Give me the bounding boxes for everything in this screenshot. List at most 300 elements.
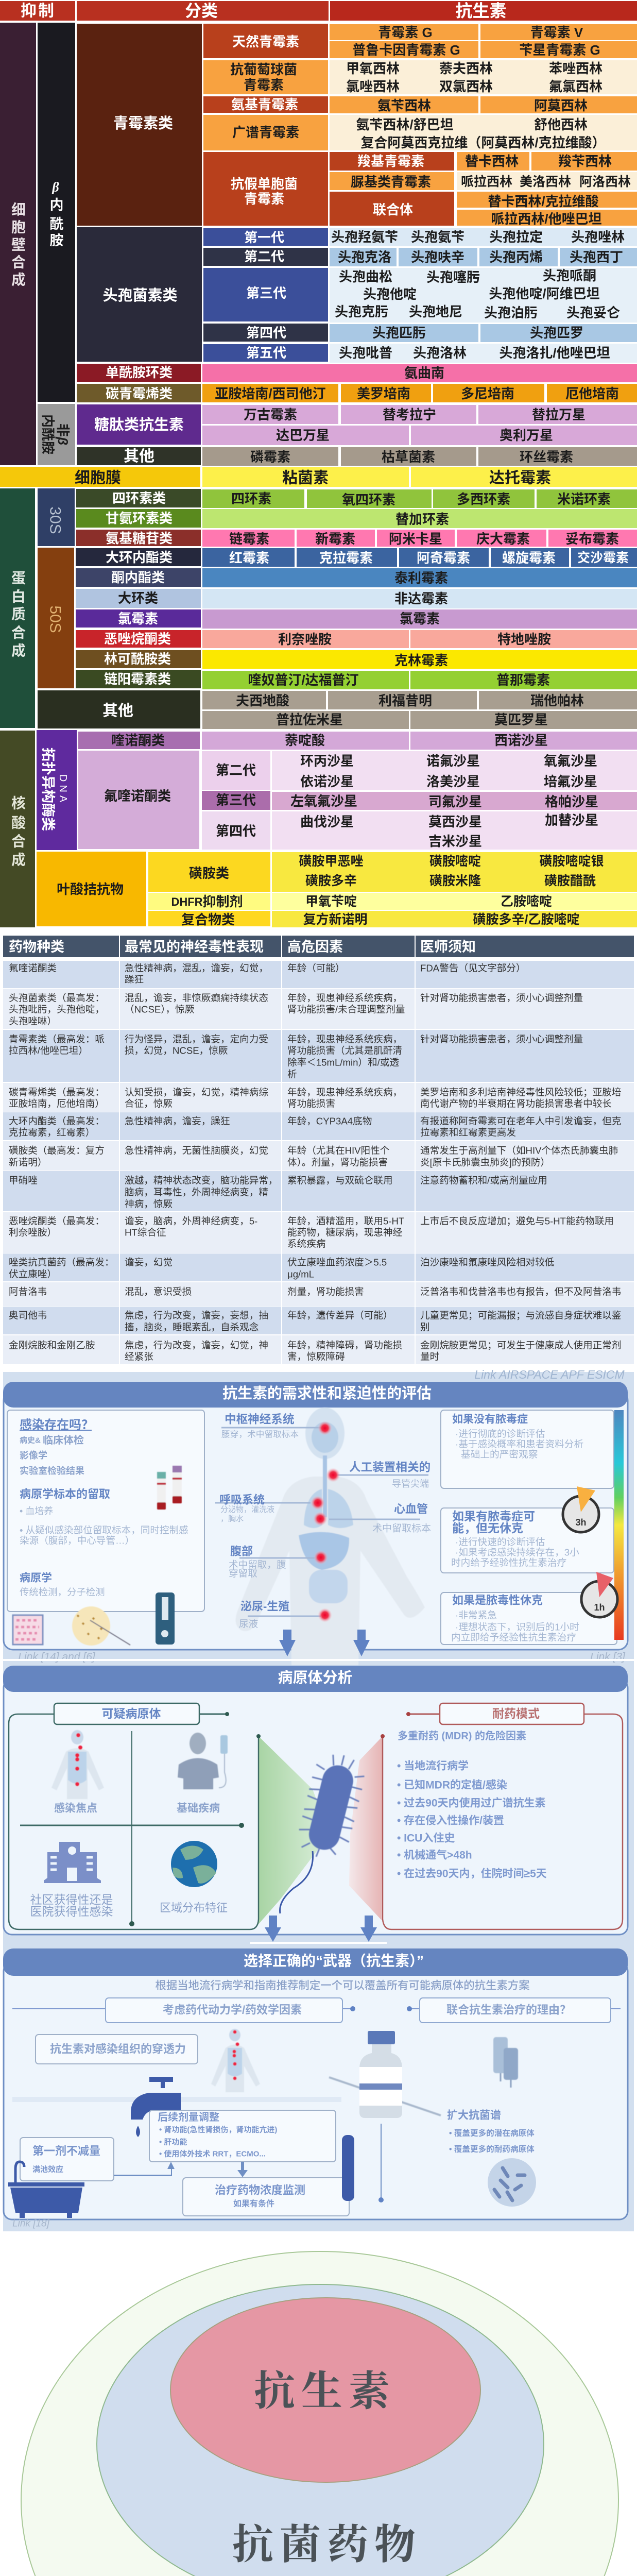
row: amantadine: 害，惊厥障碍 xyxy=(287,1351,345,1362)
source note top right: Link AIRSPACE APF ESICM xyxy=(474,1368,625,1381)
antipseudomonal penicillins: 羧苄西林 xyxy=(558,154,612,169)
box: subsequent dose adjustment: • 使用体外技术 RRT，ECMO... xyxy=(159,2149,266,2159)
sidebar: cell wall synthesis xyxy=(0,23,36,465)
source link bottom: Link [18] xyxy=(12,2218,50,2229)
label: community or hospital acquired: 社区获得性还是 xyxy=(30,1893,113,1906)
subtitle: 根据当地流行病学和指南推荐制定一个可以覆盖所有可能病原体的抗生素方案 xyxy=(155,1979,530,1992)
row: acyclovir: 泛普洛韦和伐昔洛韦也有报告，但不及阿昔洛韦 xyxy=(420,1286,621,1297)
row: penicillins: 损，幻觉，NCSE，惊厥 xyxy=(125,1045,228,1056)
row: acyclovir xyxy=(3,1282,634,1306)
box: therapeutic drug monitoring xyxy=(183,2178,349,2216)
row: macrolides: 急性精神病，谵妄，躁狂 xyxy=(125,1116,230,1126)
text: broaden spectrum: 扩大抗菌谱 xyxy=(447,2109,501,2122)
panel: choosing the right antibiotic xyxy=(3,1948,628,2219)
row: penicillins: 拉西林/他唑巴坦） xyxy=(9,1045,88,1056)
second generation: 第二代 xyxy=(216,762,256,778)
natural penicillins xyxy=(203,24,637,58)
folate antagonists: 复合物类 xyxy=(181,912,235,927)
aminopenicillins: 氨基青霉素 xyxy=(231,97,298,112)
row: fluoroquinolones: FDA警告（见文字部分） xyxy=(420,962,526,974)
antipseudomonal penicillins: 青霉素 xyxy=(244,191,284,207)
row: sulfonamides: 年龄（尤其在HIV阳性个 xyxy=(287,1145,390,1156)
sidebar: protein synthesis: 蛋白质合成 xyxy=(11,570,26,658)
list: MDR risk factors: • 过去90天内使用过广谱抗生素 xyxy=(397,1797,546,1809)
anti-staphylococcal penicillins: 双氯西林 xyxy=(439,79,493,94)
row: metronidazole: 脑病，耳毒性，外周神经病变，精 xyxy=(125,1187,268,1197)
fourth generation: 曲伐沙星 xyxy=(300,814,354,829)
other cell wall agents: 磷霉素 xyxy=(250,449,290,465)
50S label xyxy=(38,548,74,688)
fourth generation: 莫西沙星 xyxy=(428,814,482,829)
third generation xyxy=(203,268,637,323)
carbapenems: 亚胺培南/西司他汀 xyxy=(215,386,326,401)
box: therapeutic drug monitoring: 如果有条件 xyxy=(233,2199,274,2208)
oxazolidinones: 利奈唑胺 xyxy=(278,632,332,647)
carbapenems: 多尼培南 xyxy=(461,386,514,401)
row: macrolides: 大环内酯类（最高发： xyxy=(9,1116,105,1126)
box: subsequent dose adjustment: 后续剂量调整 xyxy=(158,2111,219,2123)
non beta-lactam label xyxy=(38,404,75,465)
row: oseltamivir: 儿童更常见；可能漏报；与流感自身症状难以鉴 xyxy=(420,1310,621,1321)
arrow: first dose to adjustment xyxy=(114,2162,175,2176)
anti-staphylococcal penicillins: 氟氯西林 xyxy=(549,79,602,94)
panel: suspected pathogen: 感染焦点 xyxy=(54,1802,97,1815)
box: tissue penetration: 抗生素对感染组织的穿透力 xyxy=(50,2042,186,2056)
monobactams: 氨曲南 xyxy=(404,365,444,381)
row: carbapenems: 认知受损，谵妄，幻觉，精神病综 xyxy=(125,1087,268,1097)
panel: septic shock: 内立即给予经验性抗生素治疗 xyxy=(451,1632,576,1642)
row: sulfonamides: 磺胺类（最高发：复方 xyxy=(9,1145,105,1156)
row: penicillins: 除率＜15mL/min）和/或透 xyxy=(287,1057,399,1067)
broad spectrum penicillins: 舒他西林 xyxy=(534,117,588,132)
box: therapeutic drug monitoring: 治疗药物浓度监测 xyxy=(215,2183,305,2197)
row: carbapenems: 年龄，现患神经系统疾病， xyxy=(287,1087,402,1097)
row: azole antifungals: 伏立康唑血药浓度＞5.5 xyxy=(287,1257,387,1267)
streptogramins: 链阳霉素类 xyxy=(104,671,171,687)
row: carbapenems: 美罗培南和多利培南神经毒性风险较低；亚胺培 xyxy=(420,1087,621,1097)
arrow: adjustment to monitoring xyxy=(237,2162,248,2177)
row: metronidazole: 累积暴露，与双硫仑联用 xyxy=(287,1175,393,1186)
text: broaden spectrum: • 覆盖更多的耐药病原体 xyxy=(449,2144,535,2154)
natural penicillins: 苄星青霉素 G xyxy=(519,42,600,58)
cell membrane row xyxy=(0,467,637,487)
row: fluoroquinolones xyxy=(3,961,634,988)
site: cardiovascular: 术中留取标本 xyxy=(372,1523,431,1534)
lincosamides: 林可酰胺类 xyxy=(104,651,171,667)
folate antagonists: 叶酸拮抗物 xyxy=(57,882,124,897)
glycylcyclines: 替加环素 xyxy=(395,512,449,527)
row: carbapenems: 肾功能损害 xyxy=(287,1098,335,1109)
row: cephalosporins: 肾功能损害/未合理调整剂量 xyxy=(287,1004,405,1015)
sidebar: beta-lactam: 内酰胺 xyxy=(49,197,64,248)
heading xyxy=(3,1948,628,1976)
heading: 病原体分析 xyxy=(278,1669,353,1686)
list: MDR risk factors: • 当地流行病学 xyxy=(397,1760,469,1772)
panel: is infection present: 实验室检验结果 xyxy=(20,1465,84,1476)
macrolides: 大环内酯类 xyxy=(106,550,173,565)
row: metronidazole: 注意药物蓄积和/或高剂量应用 xyxy=(420,1175,547,1186)
source link left: Link [14] and [6] xyxy=(18,1651,96,1663)
row: metronidazole: 激越，精神状态改变，脑功能异常， xyxy=(125,1175,278,1186)
row: carbapenems: 亚胺培南，厄他培南） xyxy=(9,1098,105,1109)
antipseudomonal penicillins: 美洛西林 xyxy=(520,175,571,189)
panel: is infection present xyxy=(7,1410,204,1612)
non beta-lactam label: 非 β xyxy=(55,423,71,445)
fourth generation: 加替沙星 xyxy=(545,812,598,828)
row: oseltamivir xyxy=(3,1307,634,1334)
panel: resistance pattern: 耐药模式 xyxy=(492,1707,540,1720)
third generation xyxy=(202,791,637,810)
site: abdomen: 腹部 xyxy=(230,1545,253,1558)
row: penicillins: 针对肾功能损害患者，须小心调整剂量 xyxy=(420,1033,583,1045)
third generation: 头孢他啶/阿维巴坦 xyxy=(489,286,600,301)
fifth generation: 头孢吡普 xyxy=(339,345,392,361)
topoisomerase label: 拓扑异构酶类 xyxy=(40,748,56,831)
fourth generation: 吉米沙星 xyxy=(428,834,482,849)
streptogramins xyxy=(76,670,637,689)
carbapenems: 美罗培南 xyxy=(357,386,410,401)
anti-staphylococcal penicillins: 苯唑西林 xyxy=(549,61,602,76)
panel: is infection present: • 血培养 xyxy=(20,1506,53,1516)
ketolides: 泰利霉素 xyxy=(394,570,448,586)
macrolides: 交沙霉素 xyxy=(577,551,629,565)
aminoglycosides: 氨基糖苷类 xyxy=(106,531,173,546)
aminoglycosides: 阿米卡星 xyxy=(389,531,442,547)
panel: septic shock xyxy=(441,1592,617,1645)
third generation: 头孢噻肟 xyxy=(426,269,480,285)
cephalosporin group xyxy=(77,227,637,363)
fluoroquinolones xyxy=(78,751,637,850)
box: PK/PD factors xyxy=(12,1998,355,2023)
row: azole antifungals: μg/mL xyxy=(287,1268,314,1280)
box: tissue penetration xyxy=(36,2035,198,2064)
broad spectrum penicillins: 氨苄西林/舒巴坦 xyxy=(356,117,454,132)
broad spectrum penicillins: 复合阿莫西克拉维（阿莫西林/克拉维酸） xyxy=(360,135,606,150)
third generation: 司氟沙星 xyxy=(428,794,482,809)
icon: blood culture vials xyxy=(157,1466,182,1510)
box: no first dose reduction xyxy=(20,2138,114,2181)
macrolides: 阿奇霉素 xyxy=(417,550,470,566)
icon: 3 hour clock: 3h xyxy=(575,1517,587,1528)
third generation: 头孢地尼 xyxy=(409,304,462,319)
box: reason for combination therapy: 联合抗生素治疗的理由？ xyxy=(446,2003,571,2016)
row: cephalosporins: 头孢唑啉） xyxy=(9,1016,57,1026)
tetracyclines xyxy=(76,489,637,508)
row: fluoroquinolones: 年龄（可能） xyxy=(287,962,345,974)
heading: 抗生素的需求性和紧迫性的评估 xyxy=(222,1385,432,1402)
anti-staphylococcal penicillins xyxy=(203,60,637,94)
first generation: 第一代 xyxy=(244,230,284,245)
second generation xyxy=(202,751,637,790)
fourth generation: 头孢匹罗 xyxy=(530,325,583,341)
panel: possible sepsis without shock: 时内给予经验性抗生素治疗 xyxy=(451,1557,566,1568)
quinolones: 萘啶酸 xyxy=(285,733,325,748)
site: urogenital: 泌尿-生殖 xyxy=(240,1600,289,1613)
panel: possible sepsis without shock: ·进行快速的诊断评估 xyxy=(455,1536,545,1548)
list: MDR risk factors: • 机械通气>48h xyxy=(397,1850,472,1861)
panel: possible sepsis without shock: 能，但无休克 xyxy=(452,1521,523,1535)
site: device related: 人工装置相关的 xyxy=(349,1461,431,1473)
fifth generation xyxy=(203,344,637,363)
second generation: 诺氟沙星 xyxy=(426,753,480,769)
fourth generation: 第四代 xyxy=(246,325,286,341)
site: abdomen: 穿留取 xyxy=(229,1568,257,1579)
fourth generation: 头孢匹肟 xyxy=(372,325,426,341)
row: oxazolidinones xyxy=(3,1212,634,1253)
table header: 抑制 xyxy=(21,2,56,20)
lincosamides xyxy=(76,650,637,669)
row: acyclovir: 剂量，肾功能损害 xyxy=(287,1286,364,1297)
antipseudomonal penicillins: 阿洛西林 xyxy=(579,175,631,189)
non beta-lactam label: 内酰胺 xyxy=(40,414,56,454)
arrows to next section xyxy=(265,1916,377,1942)
table header xyxy=(0,1,637,21)
panel: suspected pathogen: 基础疾病 xyxy=(177,1802,220,1815)
icon: bathtub xyxy=(8,2162,84,2218)
second generation: 第二代 xyxy=(244,249,284,264)
site: abdomen xyxy=(229,1545,328,1579)
row: macrolides: 克拉霉素，红霉素） xyxy=(9,1127,95,1138)
macrolides: 克拉霉素 xyxy=(319,550,373,566)
panel: pathogen analysis xyxy=(3,1666,628,1942)
row: oxazolidinones: HT综合征 xyxy=(125,1227,166,1238)
aminoglycosides: 链霉素 xyxy=(229,531,269,547)
first generation: 头孢唑林 xyxy=(571,229,625,245)
list: MDR risk factors: • 在过去90天内，住院时间≥5天 xyxy=(397,1867,547,1879)
panel: is infection present: 染源（腹部，中心导管…） xyxy=(20,1535,134,1546)
aminoglycosides: 庆大霉素 xyxy=(476,531,530,547)
folate antagonists: 磺胺多辛 xyxy=(305,874,357,888)
row: acyclovir: 混乱，意识受损 xyxy=(125,1286,192,1297)
second generation: 环丙沙星 xyxy=(300,753,354,769)
row: cephalosporins: 头孢菌素类（最高发： xyxy=(9,992,105,1004)
icon: IV bags xyxy=(493,2037,518,2088)
urgency gradient bar xyxy=(614,1410,624,1640)
row: metronidazole: 神病，惊厥 xyxy=(125,1198,173,1210)
row: fluoroquinolones: 急性精神病，混乱，谵妄，幻觉， xyxy=(125,962,268,974)
icon: infection focus body xyxy=(51,1730,104,1799)
row: cephalosporins: 针对肾功能损害患者，须小心调整剂量 xyxy=(420,992,583,1004)
table header row: 最常见的神经毒性表现 xyxy=(125,939,264,955)
site: urogenital: 尿液 xyxy=(239,1619,258,1629)
row: macrolides: 有报道称阿奇霉素可在老年人中引发谵妄，但克 xyxy=(420,1116,621,1126)
panel: resistance pattern xyxy=(381,1703,623,1929)
third generation: 头孢曲松 xyxy=(339,269,392,284)
monobactams: 单酰胺环类 xyxy=(106,365,173,380)
sidebar: beta-lactam xyxy=(38,23,75,402)
icon: microscope slide xyxy=(13,1615,43,1645)
quinolones: 喹诺酮类 xyxy=(111,733,165,748)
row: cephalosporins: （NCSE），惊厥 xyxy=(125,1004,194,1015)
row: oxazolidinones: 能药物，糖尿病，现患神经 xyxy=(287,1227,402,1238)
third generation: 头孢哌酮 xyxy=(543,268,596,283)
carbapenems xyxy=(77,384,637,402)
panel: is infection present: 病原学 xyxy=(20,1571,52,1584)
other protein synthesis agents: 其他 xyxy=(102,703,133,719)
folate antagonists: DHFR抑制剂 xyxy=(171,894,243,909)
oxazolidinones: 特地唑胺 xyxy=(497,632,551,647)
box: subsequent dose adjustment: • 肝功能 xyxy=(159,2137,187,2146)
row: sulfonamides: 炎[原卡氏肺囊虫肺炎]的预防） xyxy=(420,1157,550,1167)
row: cephalosporins: 头孢吡肟，头孢他啶， xyxy=(9,1004,105,1015)
panel: antibiotic decision infographic xyxy=(3,1368,634,2231)
glycopeptides: 万古霉素 xyxy=(244,407,297,422)
site: cardiovascular: 心血管 xyxy=(394,1502,428,1516)
panel: septic shock: 如果是脓毒性休克 xyxy=(452,1594,543,1606)
folate antagonists: 磺胺米隆 xyxy=(429,874,481,888)
row: azole antifungals: 伏立康唑） xyxy=(9,1268,57,1280)
table header row xyxy=(3,936,634,957)
glycopeptides: 奥利万星 xyxy=(500,428,553,443)
fourth generation xyxy=(203,324,637,342)
folate antagonists: 磺胺甲恶唑 xyxy=(299,854,364,869)
macrolides: 螺旋霉素 xyxy=(502,550,556,566)
row: oseltamivir: 年龄，遗传差异（可能） xyxy=(287,1310,393,1321)
row: cephalosporins xyxy=(3,989,634,1029)
second generation: 头孢丙烯 xyxy=(489,249,543,265)
infection sites on body xyxy=(215,1413,431,1629)
box: subsequent dose adjustment: • 肾功能(急性肾损伤，肾功能亢进) xyxy=(159,2125,277,2134)
row: penicillins: 青霉素类（最高发：哌 xyxy=(9,1033,105,1045)
ketolides: 酮内酯类 xyxy=(111,570,165,585)
icon: 3 hour clock xyxy=(563,1486,599,1532)
box: no first dose reduction: 满池效应 xyxy=(32,2165,63,2174)
row: oseltamivir: 奥司他韦 xyxy=(9,1310,47,1321)
folate antagonists: 磺胺类 xyxy=(189,866,229,881)
antipseudomonal penicillins: 替卡西林 xyxy=(465,154,519,169)
site: respiratory xyxy=(215,1493,325,1523)
lincosamides: 克林霉素 xyxy=(394,653,448,668)
panel: is infection present: • 从疑似感染部位留取标本，同时控制感 xyxy=(20,1525,188,1535)
anti-staphylococcal penicillins: 青霉素 xyxy=(244,77,284,93)
arrows to next section xyxy=(279,1630,370,1656)
list: MDR risk factors: • ICU入住史 xyxy=(397,1832,455,1844)
site: respiratory: ，胸水 xyxy=(220,1515,244,1523)
monobactams xyxy=(77,364,637,382)
streptogramins: 普那霉素 xyxy=(496,672,550,688)
outer ellipse: antimicrobial drugs xyxy=(21,2251,618,2576)
third generation: 第三代 xyxy=(246,285,286,301)
third generation: 头孢妥仑 xyxy=(566,305,620,320)
antipseudomonal penicillins: 哌拉西林 xyxy=(461,174,512,189)
icon: 1 hour clock xyxy=(581,1572,617,1617)
panel: is infection present: 病史& 临床体检 xyxy=(20,1434,84,1446)
row: amantadine xyxy=(3,1335,634,1364)
site: central nervous system xyxy=(221,1413,332,1439)
fourth generation: 第四代 xyxy=(216,823,256,839)
second generation: 培氟沙星 xyxy=(544,774,597,789)
fluoroquinolones: 氟喹诺酮类 xyxy=(104,788,171,804)
chloramphenicol: 氯霉素 xyxy=(118,611,158,626)
diagram: nested circles of antimicrobial terms xyxy=(21,2251,618,2576)
glycopeptides: 替拉万星 xyxy=(532,407,586,422)
fifth generation: 头孢洛扎/他唑巴坦 xyxy=(499,345,610,361)
panel: need and urgency assessment xyxy=(3,1382,628,1665)
other cell wall agents: 枯草菌素 xyxy=(382,449,435,465)
row: penicillins: 行为怪异，混乱，谵妄，定向力受 xyxy=(125,1033,268,1045)
folate antagonists: 磺胺醋酰 xyxy=(544,874,596,888)
site: device related xyxy=(326,1461,431,1489)
chloramphenicol xyxy=(76,609,637,629)
icon: syringe xyxy=(329,2077,441,2115)
row: sulfonamides: 新诺明） xyxy=(9,1157,47,1167)
icon: bacteria dish xyxy=(488,2158,536,2207)
row: cephalosporins: 混乱，谵妄，非惊厥癫痫持续状态 xyxy=(125,992,268,1004)
macrolides: 红霉素 xyxy=(229,550,269,566)
other cell wall agents: 环丝霉素 xyxy=(520,449,573,465)
glycylcyclines: 甘氨环素类 xyxy=(106,511,173,526)
antipseudomonal penicillins: 替卡西林/克拉维酸 xyxy=(488,194,599,209)
row: macrolides: 拉霉素和红霉素更高发 xyxy=(420,1127,516,1138)
anti-staphylococcal penicillins: 氯唑西林 xyxy=(346,79,400,94)
red wedge xyxy=(349,1736,383,1920)
sidebar: protein synthesis xyxy=(0,488,35,728)
anti-staphylococcal penicillins: 萘夫西林 xyxy=(439,61,493,76)
anti-staphylococcal penicillins: 抗葡萄球菌 xyxy=(230,62,297,77)
macrocyclics: 大环类 xyxy=(118,590,158,606)
panel: is infection present: 感染存在吗？ xyxy=(20,1418,94,1432)
aminopenicillins xyxy=(203,96,637,113)
box: subsequent dose adjustment xyxy=(149,2110,336,2162)
third generation: 头孢克肟 xyxy=(335,304,388,319)
row: penicillins: 析 xyxy=(287,1069,297,1080)
quinolones: 西诺沙星 xyxy=(494,733,548,748)
site: central nervous system: 腰穿，术中留取标本 xyxy=(221,1429,299,1439)
row: sulfonamides xyxy=(3,1141,634,1171)
middle ellipse: antibacterial drugs xyxy=(97,2284,544,2576)
carbapenems: 厄他培南 xyxy=(565,386,619,401)
glycopeptides: 糖肽类抗生素 xyxy=(94,416,184,433)
tetracyclines: 四环素 xyxy=(231,491,271,506)
vertical connector xyxy=(378,2124,384,2202)
row: oxazolidinones: 年龄，酒精滥用，联用5-HT xyxy=(287,1216,404,1226)
box: reason for combination therapy xyxy=(407,1998,621,2023)
anti-staphylococcal penicillins: 甲氧西林 xyxy=(346,61,400,76)
list: MDR risk factors: 多重耐药 (MDR) 的危险因素 xyxy=(398,1730,526,1742)
folate antagonists: 磺胺嘧啶 xyxy=(429,854,481,869)
chart: antibiotic classification table xyxy=(0,1,637,927)
icon: globe xyxy=(171,1841,217,1887)
other cell wall agents: 其他 xyxy=(124,448,154,465)
cell membrane row: 粘菌素 xyxy=(282,470,329,486)
row: penicillins xyxy=(3,1030,634,1082)
row: azole antifungals: 谵妄，幻觉 xyxy=(125,1257,173,1267)
table: neurotoxicity of antimicrobials xyxy=(3,936,634,1364)
row: sulfonamides: 急性精神病，无菌性脑膜炎，幻觉 xyxy=(125,1145,268,1156)
fifth generation: 头孢洛林 xyxy=(413,345,467,361)
row: amantadine: 经紧张 xyxy=(125,1351,153,1362)
panel: no sepsis: 基础上的严密观察 xyxy=(461,1449,538,1460)
first generation xyxy=(203,228,637,246)
glycylcyclines xyxy=(76,509,637,528)
third generation: 第三代 xyxy=(216,792,256,808)
row: amantadine: 量时 xyxy=(420,1351,439,1362)
table header: 抗生素 xyxy=(455,1,507,21)
row: amantadine: 金刚烷胺更常见；可发生于健康成人使用正常剂 xyxy=(420,1340,621,1351)
panel: is infection present: 病原学标本的留取 xyxy=(20,1488,110,1500)
oxazolidinones: 恶唑烷酮类 xyxy=(104,631,171,647)
source link right: Link [3] xyxy=(590,1651,626,1663)
row: acyclovir: 阿昔洛韦 xyxy=(9,1286,47,1297)
third generation: 头孢他啶 xyxy=(363,286,417,302)
inner ellipse: antibiotics xyxy=(170,2298,480,2482)
panel: suspected pathogen: 可疑病原体 xyxy=(102,1707,161,1720)
aminoglycosides xyxy=(76,530,637,547)
label: regional distribution: 区域分布特征 xyxy=(160,1901,228,1914)
natural penicillins: 普鲁卡因青霉素 G xyxy=(352,42,460,58)
row: amantadine: 年龄，精神障碍，肾功能损 xyxy=(287,1340,402,1351)
row: carbapenems: 碳青霉烯类（最高发： xyxy=(9,1087,105,1097)
